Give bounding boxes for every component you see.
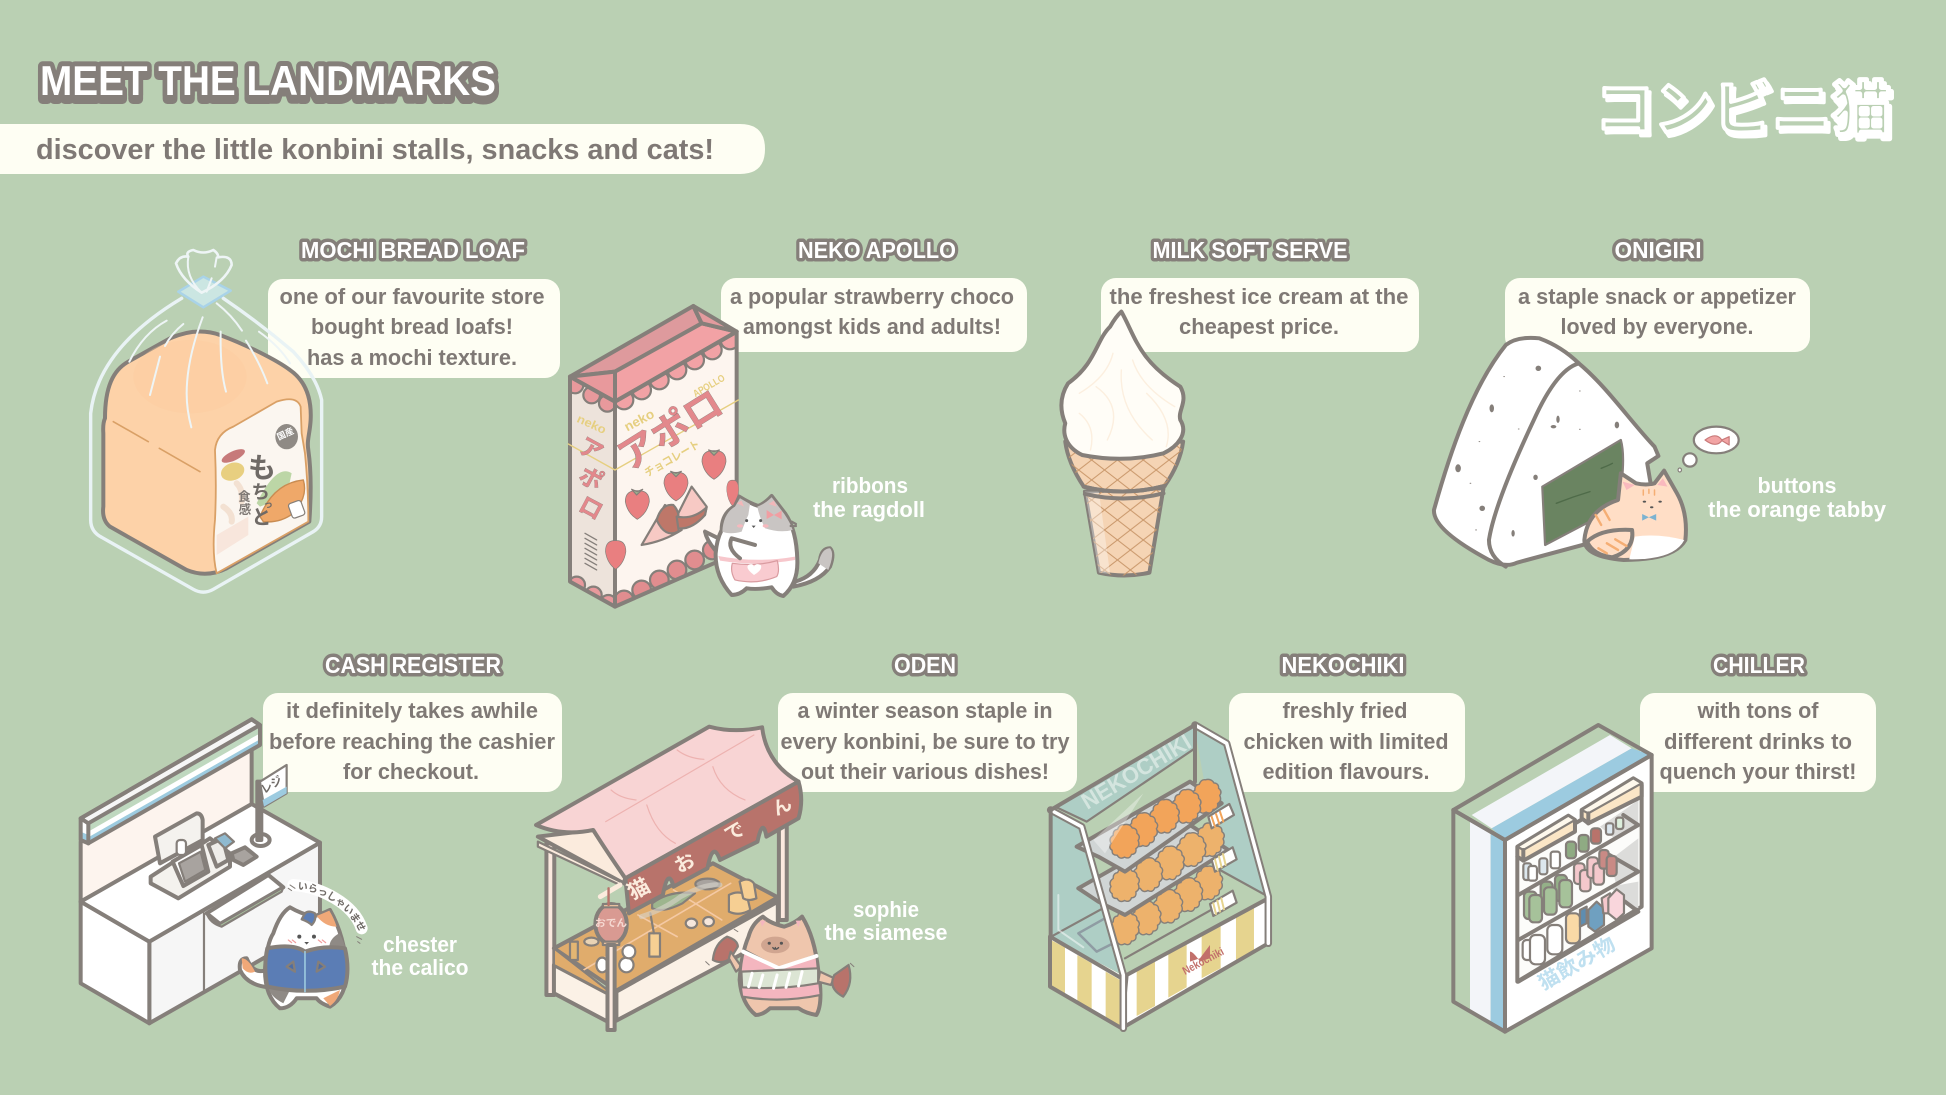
illustration: bread loaf in bag: と bbox=[251, 507, 271, 529]
description box: a staple snack or appetizer bbox=[1518, 284, 1796, 309]
description box bbox=[1101, 278, 1419, 352]
illustration: bread loaf in bag: っ bbox=[264, 499, 273, 509]
description box: cheapest price. bbox=[1179, 314, 1339, 339]
panel: oden bbox=[536, 652, 1077, 1030]
label: buttons the orange tabby: the orange tabby bbox=[1708, 497, 1886, 522]
description box: one of our favourite store bbox=[280, 284, 544, 309]
description box bbox=[721, 278, 1027, 352]
illustration: apollo chocolate box: ロ bbox=[575, 491, 607, 525]
illustration: oden stall bbox=[536, 727, 801, 1030]
logo: コンビニ猫 bbox=[1595, 77, 1891, 143]
illustration: checkout counter bbox=[81, 719, 320, 1023]
illustration: oden stall: 猫 bbox=[623, 874, 654, 904]
illustration: oden stall: で bbox=[721, 818, 749, 846]
description box: it definitely takes awhile bbox=[286, 698, 538, 723]
panel: mochi bread loaf bbox=[91, 237, 560, 592]
heading: onigiri: ONIGIRI bbox=[1614, 237, 1702, 263]
illustration: fried chicken display case: NEKOCHIKI bbox=[1077, 728, 1196, 814]
description box bbox=[778, 693, 1077, 792]
description box: chicken with limited bbox=[1244, 729, 1448, 754]
heading: neko apollo: NEKO APOLLO bbox=[798, 237, 956, 263]
illustration: bread loaf in bag: ち bbox=[251, 481, 270, 502]
description box: every konbini, be sure to try bbox=[780, 729, 1070, 754]
illustration: buttons the orange tabby cat bbox=[1584, 427, 1739, 560]
description box: amongst kids and adults! bbox=[743, 314, 1001, 339]
illustration: drinks chiller: 猫飲み物 bbox=[1534, 933, 1619, 995]
illustration: bread loaf in bag: 感 bbox=[239, 502, 252, 517]
description box: the freshest ice cream at the bbox=[1110, 284, 1408, 309]
subtitle banner: discover the little konbini stalls, snacks and cats! bbox=[36, 134, 714, 166]
description box: has a mochi texture. bbox=[307, 345, 517, 370]
label: sophie the siamese: the siamese bbox=[824, 920, 948, 945]
illustration: apollo chocolate box: アポロ bbox=[610, 382, 730, 478]
label: buttons the orange tabby bbox=[1708, 473, 1886, 522]
description box: freshly fried bbox=[1282, 698, 1408, 723]
illustration: sophie the siamese cat bbox=[706, 917, 854, 1015]
description box: out their various dishes! bbox=[801, 759, 1049, 784]
illustration: apollo chocolate box: ア bbox=[575, 432, 607, 466]
description box bbox=[268, 279, 560, 378]
label: sophie the siamese: sophie bbox=[853, 897, 919, 922]
label: ribbons the ragdoll: the ragdoll bbox=[813, 497, 925, 522]
description box: different drinks to bbox=[1664, 729, 1852, 754]
illustration: apollo chocolate box: APOLLO bbox=[691, 373, 727, 400]
description box: bought bread loafs! bbox=[311, 314, 513, 339]
illustration: apollo chocolate box: neko bbox=[622, 406, 657, 434]
illustration: oden stall: おでん bbox=[595, 918, 627, 930]
label: sophie the siamese bbox=[824, 897, 948, 945]
description box: a winter season staple in bbox=[798, 698, 1052, 723]
panel: chiller bbox=[1453, 652, 1876, 1032]
label: chester the calico: the calico bbox=[372, 955, 468, 980]
illustration: bread loaf in bag: も bbox=[248, 452, 276, 483]
illustration: chester the calico cat: いらっしゃいませ! bbox=[299, 882, 366, 931]
heading: milk soft serve: MILK SOFT SERVE bbox=[1152, 237, 1348, 263]
illustration: checkout counter: レジ bbox=[259, 773, 285, 797]
title: MEET THE LANDMARKS bbox=[40, 57, 496, 104]
panel: onigiri bbox=[1434, 237, 1886, 567]
description box: before reaching the cashier bbox=[269, 729, 555, 754]
panel: milk soft serve bbox=[1061, 237, 1419, 575]
illustration: oden stall: お bbox=[670, 849, 700, 878]
description box: quench your thirst! bbox=[1660, 759, 1856, 784]
illustration: drinks chiller bbox=[1453, 725, 1652, 1032]
label: buttons the orange tabby: buttons bbox=[1758, 473, 1836, 498]
panel: cash register bbox=[78, 652, 602, 1026]
panel: nekochiki bbox=[1050, 652, 1465, 1028]
description box: with tons of bbox=[1697, 698, 1819, 723]
illustration: bread loaf in bag bbox=[91, 250, 322, 592]
label: chester the calico bbox=[372, 932, 468, 980]
description box: loved by everyone. bbox=[1560, 314, 1754, 339]
label: chester the calico: chester bbox=[383, 932, 457, 957]
label: ribbons the ragdoll: ribbons bbox=[832, 473, 908, 498]
illustration: apollo chocolate box: ポ bbox=[575, 462, 607, 496]
illustration: fried chicken display case bbox=[1050, 725, 1268, 1028]
heading: mochi bread loaf: MOCHI BREAD LOAF bbox=[301, 237, 525, 263]
description box bbox=[1229, 693, 1465, 792]
illustration: bread loaf in bag: 国産 bbox=[275, 425, 296, 442]
illustration: fried chicken display case: Nekochiki bbox=[1181, 946, 1226, 978]
illustration: oden stall: ん bbox=[768, 793, 795, 819]
heading: nekochiki: NEKOCHIKI bbox=[1282, 652, 1404, 678]
illustration: apollo chocolate box: チョコレート bbox=[642, 438, 702, 480]
heading: oden: ODEN bbox=[894, 652, 956, 678]
illustration: apollo chocolate box bbox=[567, 306, 739, 612]
description box bbox=[1640, 693, 1876, 792]
description box bbox=[1505, 278, 1810, 352]
illustration: chester the calico cat bbox=[238, 879, 368, 1010]
illustration: bread loaf in bag: 食 bbox=[238, 489, 251, 504]
illustration: apollo chocolate box: neko bbox=[575, 412, 608, 437]
subtitle banner bbox=[0, 124, 765, 174]
illustration: soft serve cone bbox=[1061, 312, 1183, 575]
heading: cash register: CASH REGISTER bbox=[325, 652, 501, 678]
panel: neko apollo bbox=[567, 237, 1027, 612]
description box: edition flavours. bbox=[1262, 759, 1430, 784]
description box: a popular strawberry choco bbox=[730, 284, 1014, 309]
description box bbox=[263, 693, 562, 792]
description box: for checkout. bbox=[343, 759, 479, 784]
heading: chiller: CHILLER bbox=[1713, 652, 1805, 678]
label: ribbons the ragdoll bbox=[813, 473, 925, 522]
illustration: ribbons the ragdoll cat bbox=[705, 496, 832, 596]
illustration: onigiri rice ball bbox=[1434, 338, 1658, 567]
